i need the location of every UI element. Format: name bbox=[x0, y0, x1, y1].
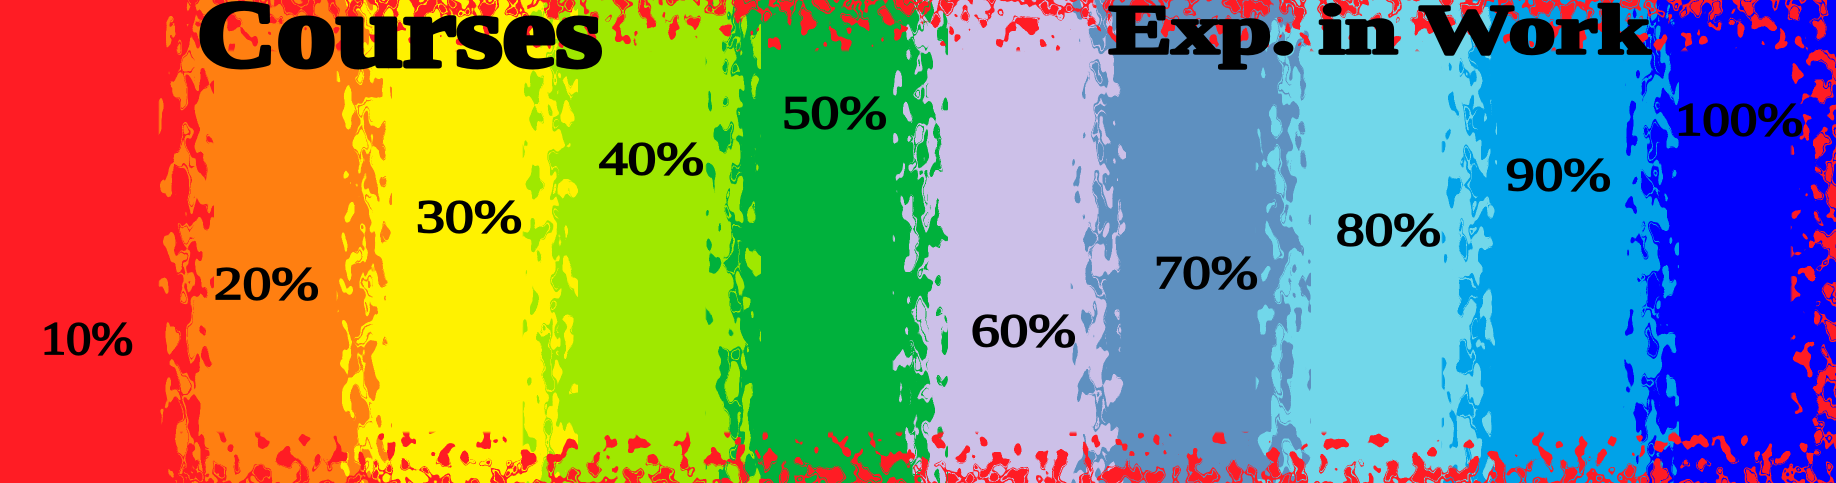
label: 20%: 20% bbox=[214, 258, 319, 310]
band: steel blue bbox=[1070, 0, 1836, 483]
label: 30%: 30% bbox=[416, 191, 522, 243]
label: 70%: 70% bbox=[1154, 247, 1258, 299]
label: 10%: 10% bbox=[41, 313, 133, 365]
band: pure blue bbox=[1623, 0, 1836, 483]
label: 50%: 50% bbox=[782, 87, 887, 139]
border: bottom bbox=[150, 431, 1836, 483]
band: lilac bbox=[892, 0, 1836, 483]
band: green bbox=[705, 0, 1836, 483]
label: 100%: 100% bbox=[1675, 94, 1803, 146]
border: top bbox=[150, 0, 1836, 52]
label: 80%: 80% bbox=[1336, 204, 1441, 256]
band: sky blue bbox=[1441, 0, 1836, 483]
border: right bbox=[1790, 0, 1836, 483]
label: 90%: 90% bbox=[1506, 149, 1611, 201]
band: lime bbox=[522, 0, 1836, 483]
label: 60%: 60% bbox=[971, 305, 1076, 357]
band: pale cyan bbox=[1255, 0, 1836, 483]
label: 40%: 40% bbox=[599, 133, 704, 185]
percentage labels bbox=[41, 87, 1803, 365]
